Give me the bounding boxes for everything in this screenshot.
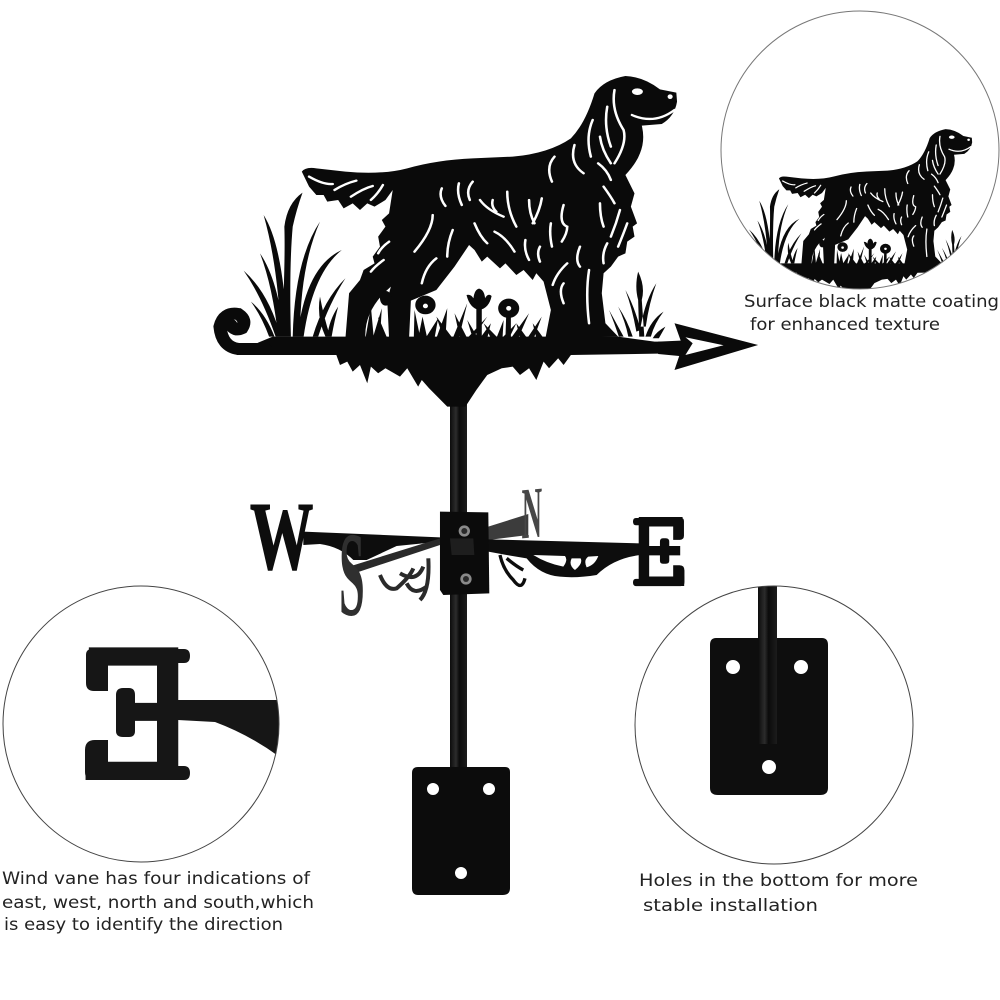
flower centres: [423, 304, 511, 311]
caption: holes: stable installation: [643, 896, 818, 916]
gap left of the middle tine: [94, 702, 116, 721]
tail curl: [220, 314, 265, 349]
letter blocks: [85, 649, 190, 780]
letter W: W: [250, 483, 313, 590]
vertical pole: [450, 400, 467, 770]
letter E: E: [80, 610, 190, 818]
block highlight: [450, 538, 474, 555]
mounting plate: [412, 767, 510, 895]
caption: directions: Wind vane has four indications of: [2, 869, 311, 889]
upper screw: [459, 525, 470, 537]
ground strip and fringe: [236, 337, 680, 407]
east arm scroll: [500, 555, 525, 585]
south arm scroll: [380, 558, 429, 600]
east arm: [488, 539, 640, 577]
letter E: E: [633, 497, 687, 606]
north arm: [488, 514, 528, 540]
dog eye: [632, 88, 643, 95]
caption: directions: is easy to identify the direction: [4, 915, 283, 935]
caption: directions: [2, 869, 314, 935]
mounting block: [440, 512, 489, 595]
meadow grass under the dog: [365, 303, 544, 338]
white fur cut-outs: [309, 90, 674, 323]
callout circle: east letter: [3, 586, 281, 862]
flower clusters: [380, 289, 519, 318]
plate close-up: [710, 580, 828, 795]
circle outline: [635, 586, 913, 864]
lower screw: [460, 573, 472, 585]
south arm: [347, 538, 440, 575]
letter S: S: [339, 507, 365, 641]
caption: coating: Surface black matte coating: [744, 292, 999, 312]
arrow head: [658, 323, 758, 370]
east letter on the vane: [633, 497, 687, 606]
left and right grass: [244, 193, 665, 338]
letter blocks: [633, 518, 684, 586]
gap between hind legs: [365, 287, 391, 338]
dog close-up: [749, 129, 972, 288]
caption: coating: for enhanced texture: [750, 315, 940, 335]
letter N: N: [522, 472, 542, 555]
caption: holes: Holes in the bottom for more: [639, 871, 918, 891]
callout circle: plate holes: [635, 580, 913, 864]
circle outline: [3, 586, 279, 862]
circle outline: [721, 11, 999, 289]
caption: coating: [744, 292, 999, 335]
callout circle: coating: [721, 11, 1000, 299]
compass arms assembly: [250, 472, 640, 641]
caption: holes: [639, 871, 918, 916]
west arm: [303, 532, 440, 560]
dog silhouette vane: [220, 76, 758, 407]
dog nose mark: [668, 94, 673, 99]
caption: directions: east, west, north and south,which: [2, 893, 314, 913]
dog body: [302, 76, 677, 338]
large east letter and arm: [85, 647, 278, 780]
